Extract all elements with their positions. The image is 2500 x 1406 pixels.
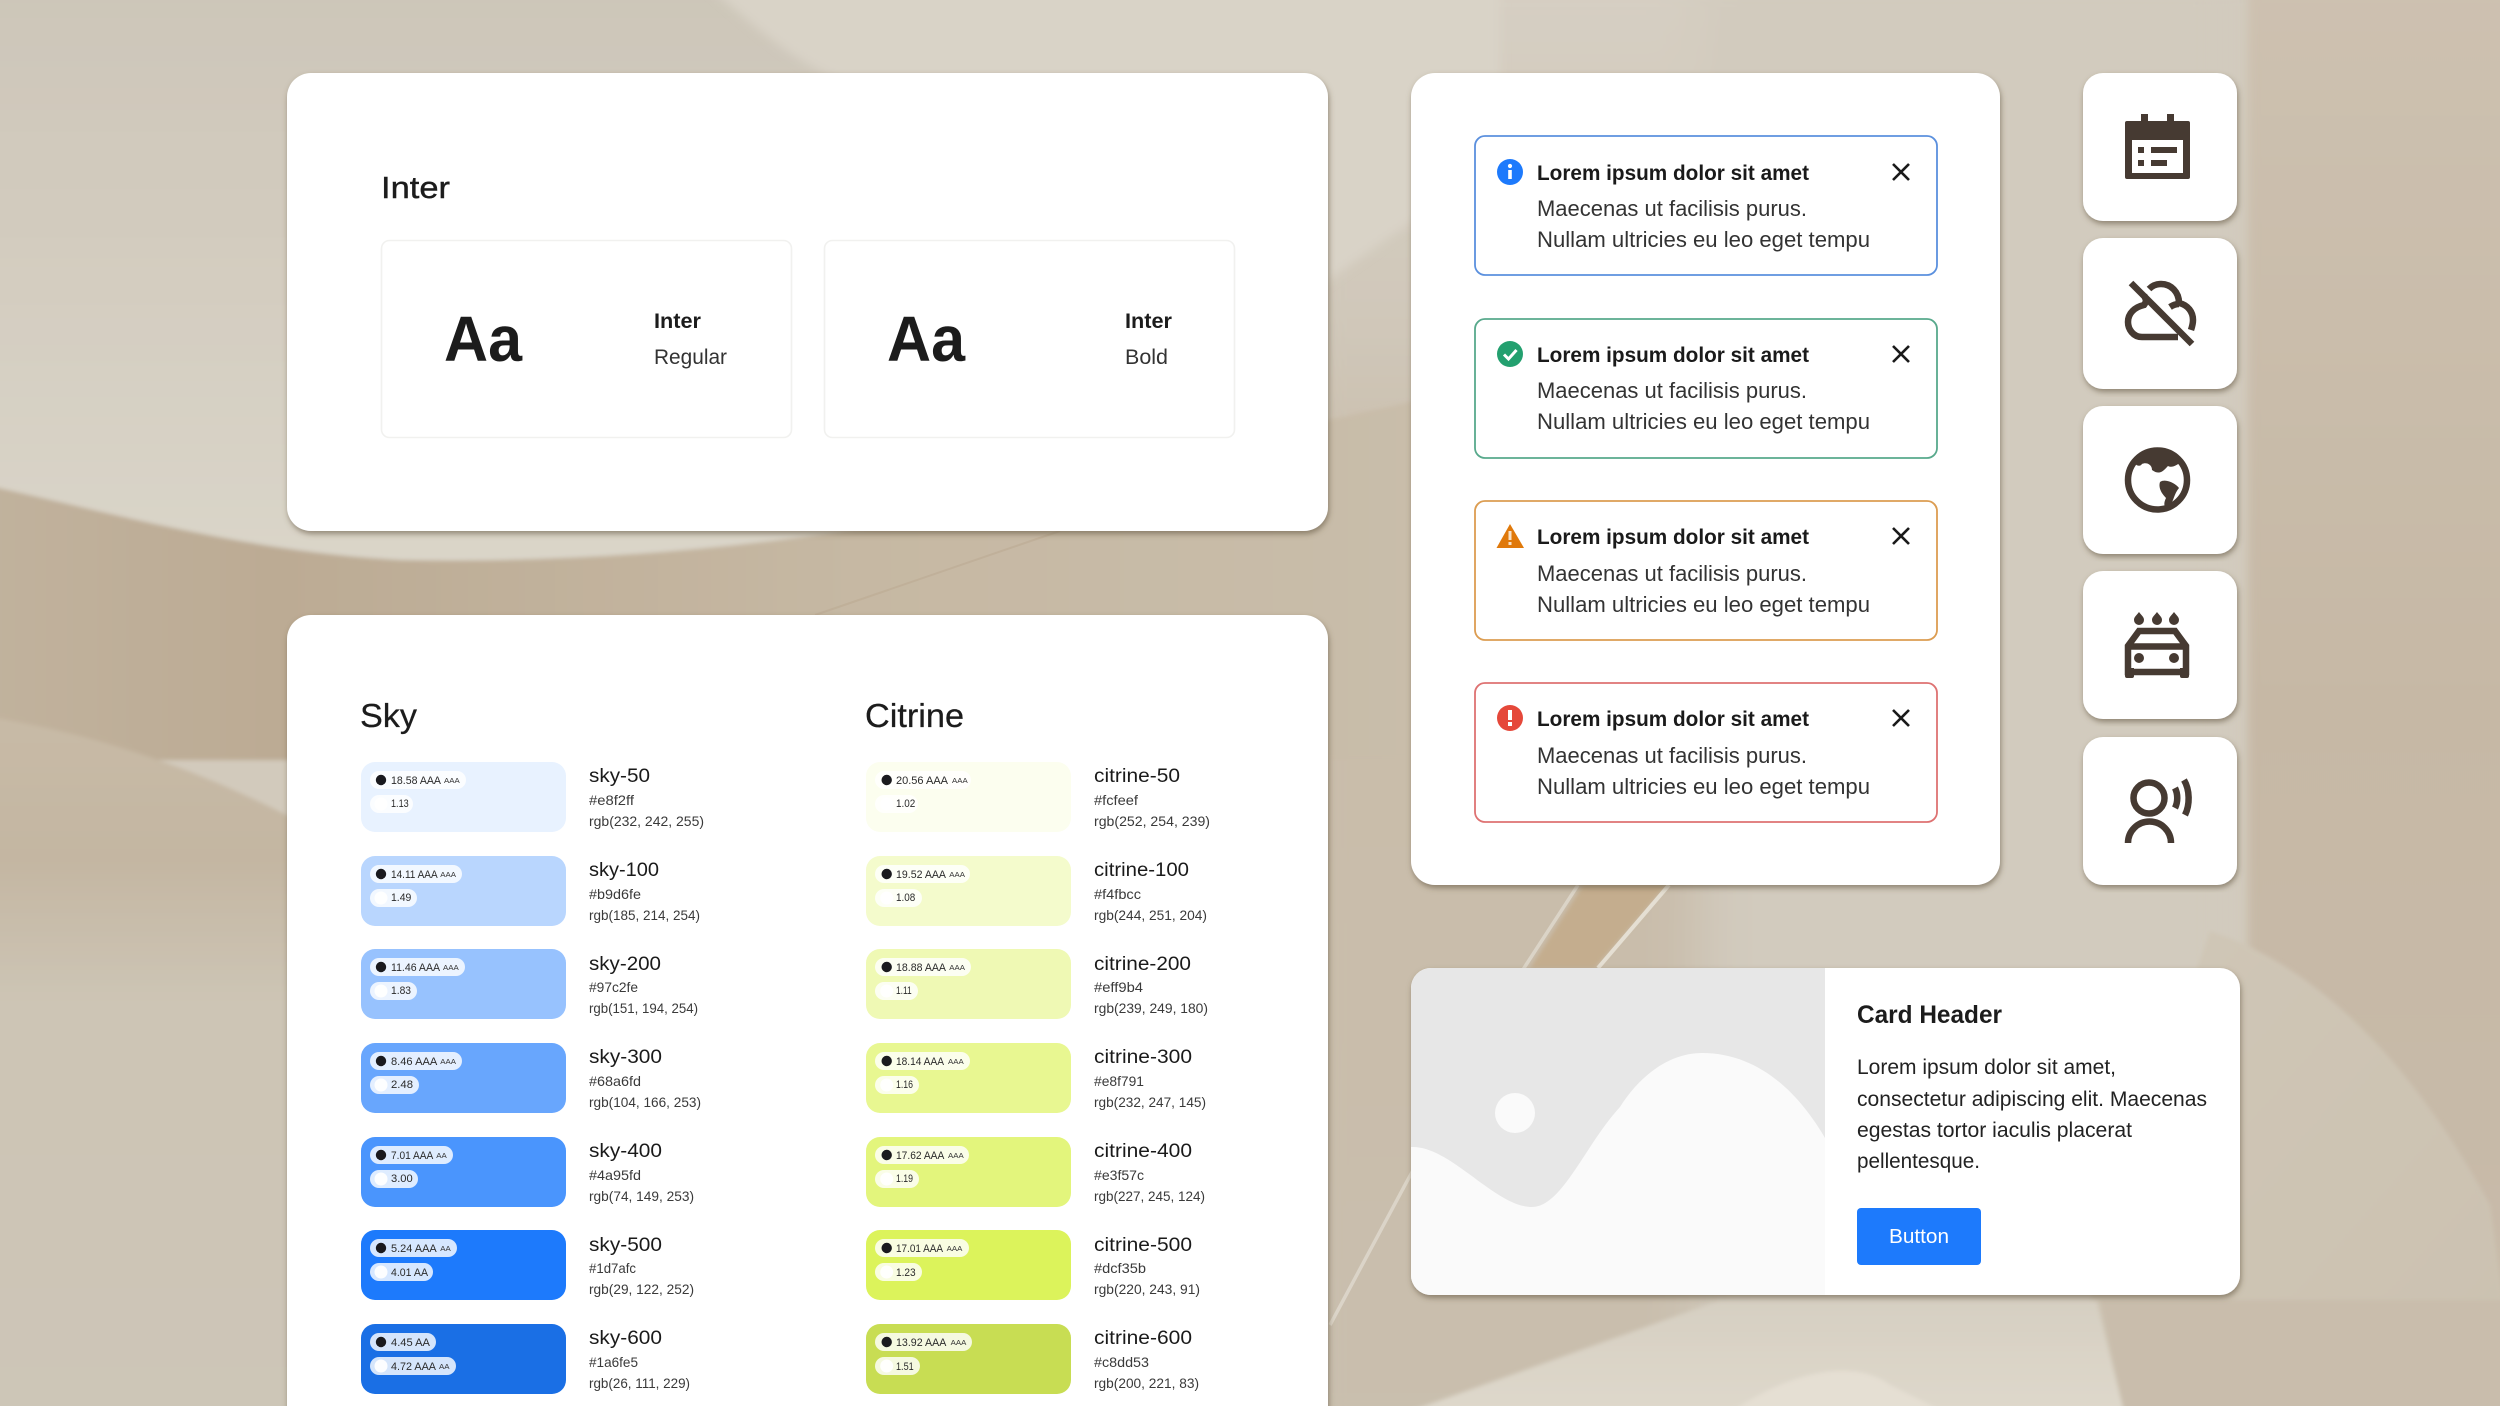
swatch: citrine-500: 1.23 xyxy=(896,1267,916,1279)
alert: warning xyxy=(1475,501,1937,640)
font card: Inter Bold: Inter xyxy=(1125,310,1172,333)
swatch: sky-100: rgb(185, 214, 254) xyxy=(589,907,700,923)
swatch: citrine-600: AAA xyxy=(951,1338,966,1347)
swatch: citrine-300: citrine-300 xyxy=(1094,1047,1192,1068)
font card: Inter Regular xyxy=(382,240,792,438)
swatch: sky-300: 2.48 xyxy=(391,1079,413,1091)
font card: Inter Regular: Aa xyxy=(444,303,522,375)
swatch: citrine-300: #e8f791 xyxy=(1094,1073,1144,1089)
swatch: citrine-200: 18.88 AAA xyxy=(896,962,947,974)
panel: colour palettes xyxy=(287,615,1328,1406)
swatch: sky-100: #b9d6fe xyxy=(589,886,641,902)
swatch: citrine-50: 20.56 AAA xyxy=(896,775,949,787)
swatch: sky-600: sky-600 xyxy=(589,1328,662,1349)
swatch: sky-100: AAA xyxy=(440,870,456,879)
swatch: citrine-100: #f4fbcc xyxy=(1094,886,1141,902)
swatch: sky-500: #1d7afc xyxy=(589,1260,636,1276)
alert: error: Nullam ultricies eu leo eget tempu xyxy=(1537,774,1870,799)
alert: warning: Maecenas ut facilisis purus. xyxy=(1537,561,1807,586)
swatch: citrine-400: AAA xyxy=(948,1151,964,1160)
swatch: sky-400 xyxy=(361,1137,694,1207)
card body text: consectetur adipiscing elit. Maecenas xyxy=(1857,1088,2207,1111)
swatch: citrine-100: rgb(244, 251, 204) xyxy=(1094,907,1207,923)
swatch: citrine-300 xyxy=(866,1043,1206,1113)
swatch: sky-400: rgb(74, 149, 253) xyxy=(589,1188,694,1204)
font card: Inter Bold: Aa xyxy=(887,303,965,375)
font card: Inter Bold: Bold xyxy=(1125,346,1168,369)
swatch: citrine-300: 1.16 xyxy=(896,1079,913,1091)
heading: Sky: Sky xyxy=(360,697,418,734)
swatch: sky-50 xyxy=(361,762,704,832)
swatch: citrine-50 xyxy=(866,762,1210,832)
swatch: sky-50: rgb(232, 242, 255) xyxy=(589,813,704,829)
alert: info xyxy=(1475,136,1937,275)
swatch: citrine-400: #e3f57c xyxy=(1094,1167,1144,1183)
icon tile: car wash xyxy=(2083,571,2237,719)
alert: warning: Nullam ultricies eu leo eget tempu xyxy=(1537,592,1870,617)
swatch: citrine-300: rgb(232, 247, 145) xyxy=(1094,1094,1206,1110)
heading: Citrine: Citrine xyxy=(865,697,964,734)
swatch: sky-100 xyxy=(361,856,700,926)
swatch: sky-200: #97c2fe xyxy=(589,979,638,995)
swatch: sky-50: #e8f2ff xyxy=(589,792,634,808)
swatch: sky-300: #68a6fd xyxy=(589,1073,641,1089)
swatch: citrine-50: rgb(252, 254, 239) xyxy=(1094,813,1210,829)
swatch: citrine-50: citrine-50 xyxy=(1094,766,1180,787)
swatch: sky-300: AAA xyxy=(440,1057,456,1066)
alert: error: Maecenas ut facilisis purus. xyxy=(1537,743,1807,768)
swatch: sky-300: sky-300 xyxy=(589,1047,662,1068)
swatch: sky-400: 7.01 AAA xyxy=(391,1150,434,1162)
card body text: Lorem ipsum dolor sit amet, xyxy=(1857,1056,2116,1079)
swatch: citrine-50: AAA xyxy=(952,776,968,785)
panel: alerts xyxy=(1411,73,2000,885)
button xyxy=(1857,1208,1981,1265)
swatch: sky-500: rgb(29, 122, 252) xyxy=(589,1281,694,1297)
swatch: citrine-600: #c8dd53 xyxy=(1094,1354,1149,1370)
swatch: sky-300: rgb(104, 166, 253) xyxy=(589,1094,701,1110)
icon tile: cloud off xyxy=(2083,238,2237,389)
font card: Inter Regular: Inter xyxy=(654,310,701,333)
swatch: citrine-400 xyxy=(866,1137,1205,1207)
swatch: sky-500 xyxy=(361,1230,694,1300)
swatch: sky-200: 1.83 xyxy=(391,985,411,997)
swatch: citrine-600: 13.92 AAA xyxy=(896,1337,947,1349)
heading: Inter: Inter xyxy=(381,170,450,205)
swatch: citrine-100 xyxy=(866,856,1207,926)
swatch: sky-200: AAA xyxy=(443,963,459,972)
swatch: citrine-500: #dcf35b xyxy=(1094,1260,1146,1276)
swatch: citrine-100: citrine-100 xyxy=(1094,860,1189,881)
swatch: sky-200: rgb(151, 194, 254) xyxy=(589,1000,698,1016)
swatch: sky-500: 4.01 AA xyxy=(391,1267,429,1279)
alert: warning: Lorem ipsum dolor sit amet xyxy=(1537,526,1809,549)
swatch: citrine-200: #eff9b4 xyxy=(1094,979,1143,995)
swatch: sky-50: 1.13 xyxy=(391,798,409,810)
alert: success: Maecenas ut facilisis purus. xyxy=(1537,378,1807,403)
swatch: sky-300: 8.46 AAA xyxy=(391,1056,438,1068)
card body text xyxy=(1857,1056,2207,1173)
alert: success: Nullam ultricies eu leo eget tempu xyxy=(1537,409,1870,434)
swatch: citrine-500: citrine-500 xyxy=(1094,1235,1192,1256)
swatch: sky-400: sky-400 xyxy=(589,1141,662,1162)
icon tile: globe xyxy=(2083,406,2237,554)
alert: error xyxy=(1475,683,1937,822)
swatch: sky-100: 1.49 xyxy=(391,892,411,904)
swatch: citrine-500: rgb(220, 243, 91) xyxy=(1094,1281,1200,1297)
swatch: citrine-200: citrine-200 xyxy=(1094,954,1191,975)
alert: success: Lorem ipsum dolor sit amet xyxy=(1537,344,1809,367)
image placeholder xyxy=(1411,968,1825,1295)
swatch: citrine-500: AAA xyxy=(947,1244,962,1253)
swatch: citrine-400: 17.62 AAA xyxy=(896,1150,945,1162)
alert: info: Maecenas ut facilisis purus. xyxy=(1537,196,1807,221)
swatch: sky-200: sky-200 xyxy=(589,954,661,975)
card heading: Card Header xyxy=(1857,1001,2002,1029)
swatch: sky-50: sky-50 xyxy=(589,766,650,787)
swatch: citrine-50: 1.02 xyxy=(896,798,915,810)
swatch: sky-400: #4a95fd xyxy=(589,1167,641,1183)
swatch: citrine-500: 17.01 AAA xyxy=(896,1243,944,1255)
swatch: sky-500: AA xyxy=(440,1244,451,1253)
swatch: sky-50: 18.58 AAA xyxy=(391,775,442,787)
swatch: citrine-200 xyxy=(866,949,1208,1019)
swatch: sky-300 xyxy=(361,1043,701,1113)
swatch: sky-600: rgb(26, 111, 229) xyxy=(589,1375,690,1391)
swatch: citrine-600: citrine-600 xyxy=(1094,1328,1192,1349)
swatch: sky-200 xyxy=(361,949,698,1019)
button: Button xyxy=(1889,1225,1949,1248)
swatch: citrine-100: 1.08 xyxy=(896,892,915,904)
swatch: citrine-400: rgb(227, 245, 124) xyxy=(1094,1188,1205,1204)
alert: info: Lorem ipsum dolor sit amet xyxy=(1537,162,1809,185)
swatch: citrine-600 xyxy=(866,1324,1199,1394)
swatch: citrine-400: citrine-400 xyxy=(1094,1141,1192,1162)
swatch: sky-200: 11.46 AAA xyxy=(391,962,441,974)
swatch: citrine-300: AAA xyxy=(948,1057,964,1066)
swatch: sky-600 xyxy=(361,1324,690,1394)
icon tile: calendar xyxy=(2083,73,2237,221)
swatch: citrine-400: 1.19 xyxy=(896,1173,913,1185)
card body text: egestas tortor iaculis placerat xyxy=(1857,1119,2132,1142)
font card: Inter Bold xyxy=(824,240,1234,438)
swatch: sky-400: 3.00 xyxy=(391,1173,413,1185)
swatch: citrine-300: 18.14 AAA xyxy=(896,1056,945,1068)
swatch: sky-50: AAA xyxy=(444,776,460,785)
swatch: sky-100: sky-100 xyxy=(589,860,659,881)
swatch: citrine-100: 19.52 AAA xyxy=(896,869,947,881)
alert: error: Lorem ipsum dolor sit amet xyxy=(1537,708,1809,731)
font card: Inter Regular: Regular xyxy=(654,346,727,369)
swatch: sky-500: 5.24 AAA xyxy=(391,1243,437,1255)
swatch: sky-100: 14.11 AAA xyxy=(391,869,438,881)
swatch: citrine-50: #fcfeef xyxy=(1094,792,1138,808)
swatch: citrine-500 xyxy=(866,1230,1200,1300)
swatch: citrine-100: AAA xyxy=(949,870,965,879)
swatch: citrine-600: rgb(200, 221, 83) xyxy=(1094,1375,1199,1391)
swatch: citrine-600: 1.51 xyxy=(896,1361,914,1373)
swatch: citrine-200: AAA xyxy=(949,963,965,972)
panel: typography xyxy=(287,73,1328,531)
alert: success xyxy=(1475,319,1937,458)
swatch: sky-600: 4.72 AAA xyxy=(391,1361,437,1373)
swatch: sky-500: sky-500 xyxy=(589,1235,662,1256)
swatch: citrine-200: rgb(239, 249, 180) xyxy=(1094,1000,1208,1016)
swatch: sky-600: AA xyxy=(439,1362,450,1371)
card body text: pellentesque. xyxy=(1857,1150,1980,1173)
swatch: citrine-200: 1.11 xyxy=(896,985,912,997)
card xyxy=(1411,968,2240,1295)
swatch: sky-400: AA xyxy=(436,1151,447,1160)
swatch: sky-600: #1a6fe5 xyxy=(589,1354,638,1370)
swatch: sky-600: 4.45 AA xyxy=(391,1337,431,1349)
alert: info: Nullam ultricies eu leo eget tempu xyxy=(1537,227,1870,252)
icon tile: person voice xyxy=(2083,737,2237,885)
